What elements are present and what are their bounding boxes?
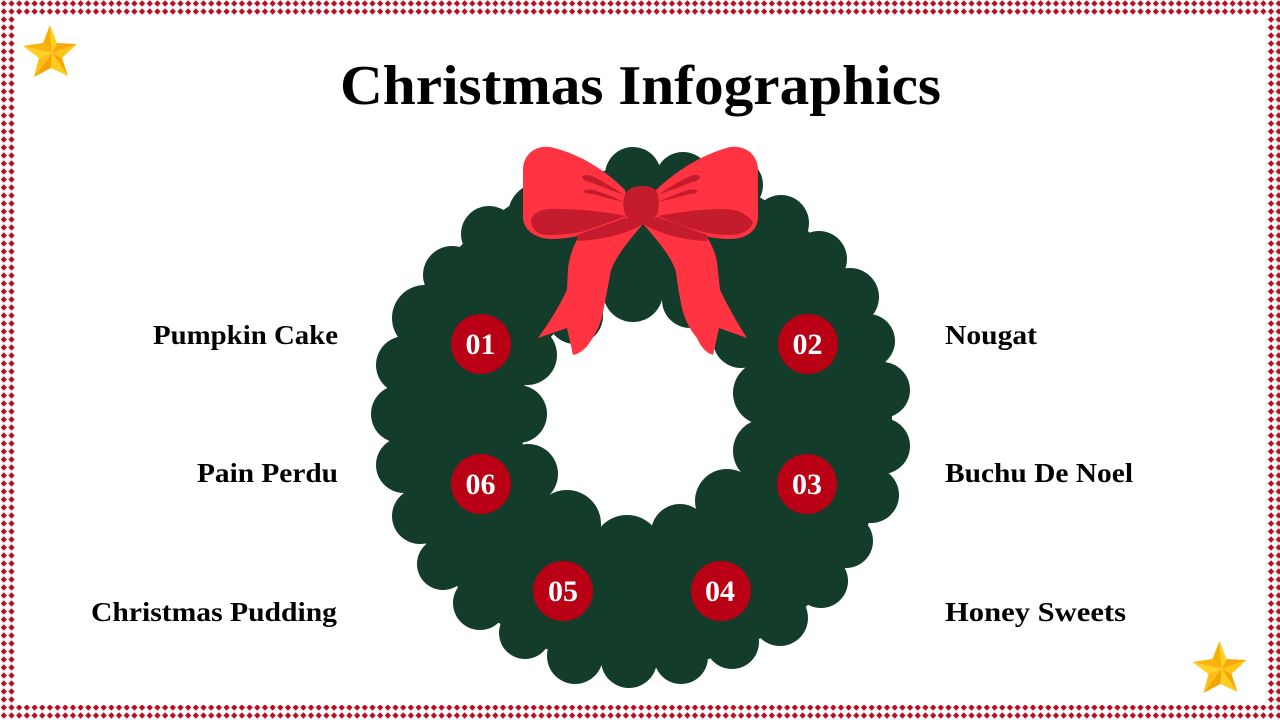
number badge 03: [777, 454, 837, 514]
number badge 06: 06: [466, 468, 496, 501]
number badge 01: 01: [466, 328, 496, 361]
left bow wing: [523, 147, 630, 239]
right bow wing: [652, 147, 758, 239]
number badge 06: [451, 454, 511, 514]
icon: gold star top left: [23, 25, 77, 77]
label: Honey Sweets: Honey Sweets: [945, 597, 1126, 627]
bow creases: [582, 175, 700, 202]
number badge 04: [691, 561, 751, 621]
number badge 05: [533, 561, 593, 621]
number badge 01: [451, 314, 511, 374]
wreath: [371, 147, 910, 688]
icon: gold star bottom right: [1192, 641, 1246, 693]
right wing shadow: [643, 209, 753, 241]
right ribbon tail: [643, 224, 747, 355]
label: Christmas Pudding: Christmas Pudding: [91, 597, 338, 627]
left ribbon tail: [538, 224, 643, 355]
number badge 05: 05: [548, 575, 578, 608]
number badge 02: [778, 314, 838, 374]
left wing shadow: [531, 209, 643, 241]
label: Buchu De Noel: Buchu De Noel: [945, 458, 1134, 488]
bow: [523, 147, 758, 355]
title: Christmas Infographics: [340, 55, 941, 117]
label: Nougat: Nougat: [945, 320, 1037, 350]
label: Pain Perdu: Pain Perdu: [197, 458, 338, 488]
number badge 02: 02: [792, 328, 822, 361]
number badge 03: 03: [792, 468, 822, 501]
bow knot: [623, 186, 659, 224]
number badge 04: 04: [705, 575, 735, 608]
label: Pumpkin Cake: Pumpkin Cake: [153, 320, 338, 350]
